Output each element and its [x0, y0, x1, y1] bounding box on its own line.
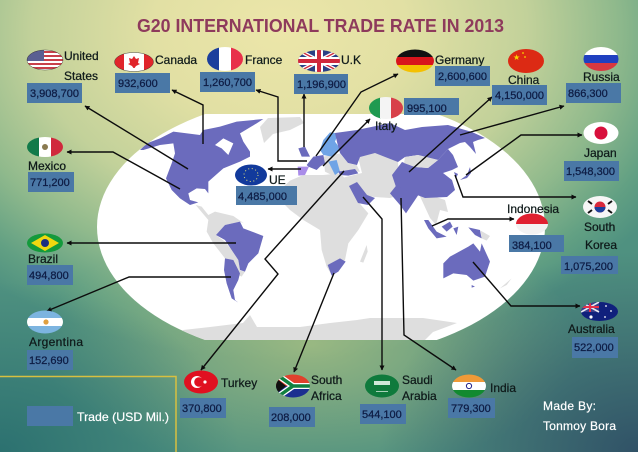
value: 1,548,300 — [566, 166, 615, 178]
flag: Russia — [583, 47, 619, 72]
country: Brazil — [27, 234, 73, 285]
country: Argentina — [27, 310, 83, 370]
flag: Mexico — [27, 137, 63, 157]
name: Indonesia — [507, 202, 559, 216]
flag: Argentina — [27, 310, 63, 334]
country: Germany — [396, 49, 490, 86]
Saudi Arabia — [349, 182, 375, 205]
credit: Tonmoy Bora — [543, 419, 616, 433]
country: U.K — [294, 50, 361, 94]
name: Brazil — [28, 252, 58, 266]
name: Canada — [155, 53, 197, 67]
name line 2: Arabia — [402, 389, 437, 403]
value: 152,690 — [29, 355, 69, 367]
flag: Brazil — [27, 234, 63, 252]
value: 544,100 — [362, 409, 402, 421]
value: 1,196,900 — [297, 79, 346, 91]
arrow: Russia — [460, 106, 564, 135]
country: Italy — [369, 97, 459, 133]
value: 771,200 — [30, 177, 70, 189]
flag: Turkey — [184, 370, 218, 394]
arrow: United States — [85, 106, 188, 169]
country: Saudi Arabia — [360, 373, 437, 424]
name: Argentina — [29, 335, 83, 349]
value: 522,000 — [574, 342, 614, 354]
flag: European Union — [235, 164, 267, 186]
credit — [543, 399, 616, 433]
country: Turkey — [180, 370, 257, 418]
Middle East and Central Asia — [342, 152, 400, 198]
name: UE — [269, 173, 286, 187]
country: France — [200, 47, 283, 92]
country: Canada — [114, 52, 197, 93]
country: UE — [235, 164, 297, 205]
arrow: Italy — [323, 119, 370, 166]
flag: U.K — [298, 50, 340, 72]
India — [390, 185, 418, 213]
arrow: South Africa — [294, 273, 334, 372]
Australia — [443, 243, 512, 288]
name: Japan — [584, 146, 617, 160]
country: Japan — [564, 122, 619, 181]
value: 779,300 — [451, 403, 491, 415]
arrow: Japan — [466, 135, 582, 175]
Indonesia — [424, 220, 490, 241]
Japan and Korea — [454, 167, 471, 180]
country: South Korea — [561, 196, 618, 274]
name line 2: Africa — [311, 389, 342, 403]
value: 384,100 — [512, 240, 552, 252]
flag: Italy — [369, 97, 404, 119]
Southeast Asia — [420, 196, 448, 224]
name: Saudi — [402, 373, 433, 387]
value: 866,300 — [568, 88, 608, 100]
value: 370,800 — [182, 403, 222, 415]
flag: Canada — [114, 52, 154, 72]
value: 932,600 — [118, 78, 158, 90]
title: G20 INTERNATIONAL TRADE RATE IN 2013 — [137, 16, 504, 36]
flag: Germany — [396, 49, 434, 73]
value: 1,075,200 — [564, 261, 613, 273]
flag: Japan — [584, 122, 618, 144]
arrow: UE — [268, 168, 301, 170]
name: Turkey — [221, 376, 257, 390]
arrow: Brazil — [67, 242, 236, 244]
arrow: Argentina — [47, 277, 231, 311]
world map — [97, 114, 545, 340]
arrow: China — [409, 97, 492, 172]
country: Indonesia — [507, 202, 564, 252]
value: 1,260,700 — [203, 77, 252, 89]
name: France — [245, 53, 283, 67]
flag: Australia — [581, 302, 618, 321]
name: United — [64, 49, 99, 63]
flag: China: ★ — [513, 53, 520, 62]
arrow: Indonesia — [432, 219, 514, 226]
Mongolia — [404, 155, 438, 168]
Antarctica — [183, 315, 457, 342]
arrow: Australia — [473, 262, 580, 306]
name: Mexico — [28, 159, 66, 173]
country: Russia — [566, 47, 621, 103]
name: Australia — [568, 322, 615, 336]
name: India — [490, 381, 516, 395]
name line 2: Korea — [585, 238, 617, 252]
name: Russia — [583, 70, 620, 84]
flag: Saudi Arabia — [365, 374, 399, 398]
value: 208,000 — [271, 412, 311, 424]
arrow: France — [256, 90, 307, 161]
legend label: Trade (USD Mil.) — [77, 410, 169, 424]
Greenland and Iceland — [260, 117, 304, 143]
name: Italy — [375, 119, 397, 133]
South America — [196, 205, 263, 303]
arrow: India — [401, 198, 456, 370]
China — [392, 149, 458, 198]
value: 995,100 — [407, 103, 447, 115]
Africa — [280, 173, 368, 276]
value: 2,600,600 — [438, 71, 487, 83]
country: India — [448, 374, 516, 418]
arrow: Turkey — [201, 171, 344, 370]
flag: India — [452, 374, 487, 398]
Europe — [298, 132, 360, 177]
credit: Made By: — [543, 399, 596, 413]
arrow: Mexico — [67, 152, 180, 189]
arrow: Canada — [172, 90, 203, 144]
country: United States — [27, 49, 99, 103]
flag: France — [207, 47, 243, 71]
flag: Indonesia — [516, 213, 548, 235]
country: Mexico — [27, 137, 74, 192]
flag: South Korea — [583, 196, 617, 218]
flag: South Africa — [276, 374, 311, 398]
value: 3,908,700 — [30, 88, 79, 100]
country: South Africa — [269, 373, 342, 427]
arrow: Saudi Arabia — [363, 197, 382, 370]
name: South — [584, 220, 615, 234]
flag: United States — [27, 50, 63, 70]
name: China — [508, 73, 540, 87]
value: 494,800 — [29, 270, 69, 282]
name: Germany — [435, 53, 484, 67]
name line 2: States — [64, 69, 98, 83]
Russia — [335, 123, 485, 165]
North America — [140, 119, 263, 205]
arrow: Germany — [316, 74, 398, 156]
country: China — [492, 49, 547, 105]
value: 4,150,000 — [495, 90, 544, 102]
name: South — [311, 373, 342, 387]
country: Australia — [568, 302, 618, 358]
name: U.K — [341, 53, 361, 67]
arrow: U.K — [303, 94, 305, 147]
arrow: South Korea — [455, 175, 576, 197]
legend swatch — [27, 406, 73, 426]
legend — [0, 376, 176, 452]
value: 4,485,000 — [238, 191, 287, 203]
